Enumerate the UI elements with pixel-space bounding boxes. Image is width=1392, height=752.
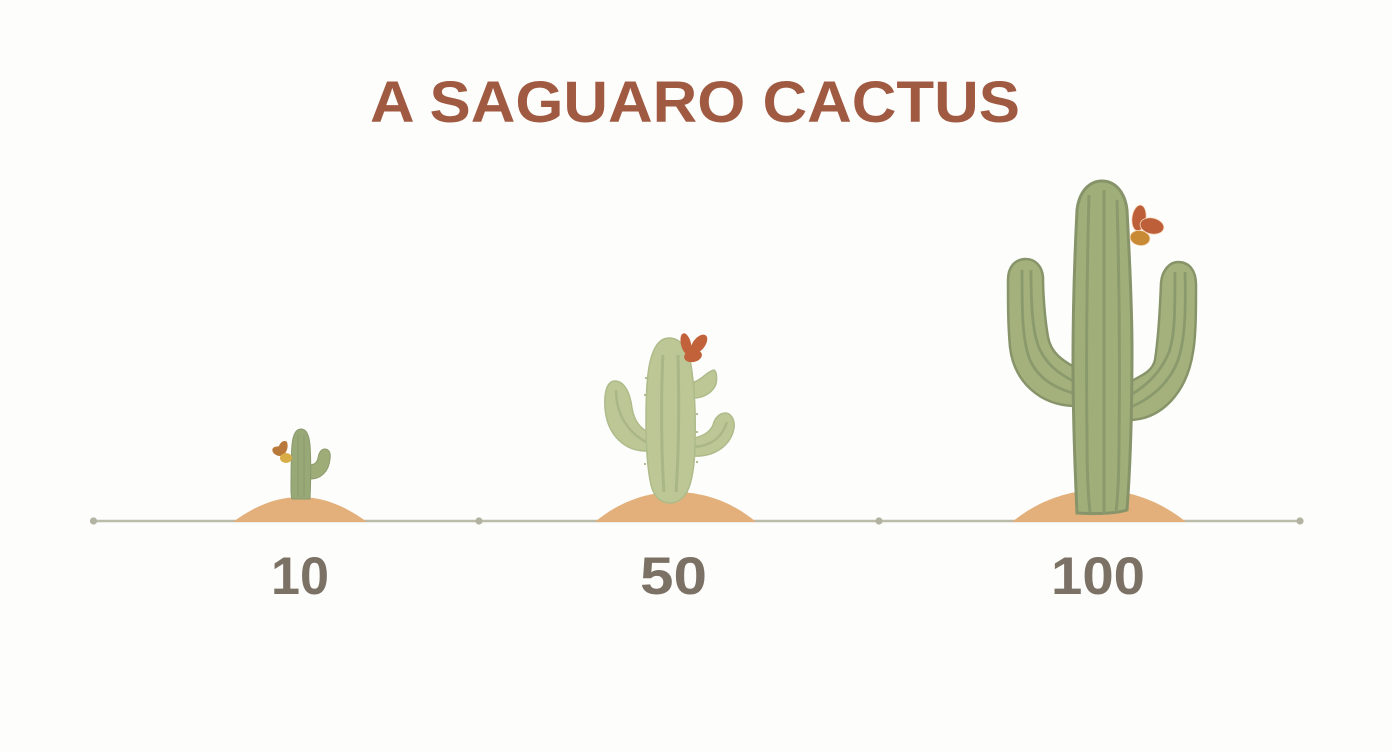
trunk [646, 338, 695, 503]
left arm [605, 381, 648, 451]
trunk [1073, 181, 1132, 514]
label: age 100: 100 [1051, 547, 1145, 606]
cactus: age 10 [272, 429, 330, 499]
arm [308, 449, 330, 479]
flowers [272, 441, 288, 456]
right arm [1130, 262, 1196, 420]
mound: age 50 [595, 492, 756, 522]
trunk [291, 429, 311, 499]
label: age 50: 50 [640, 547, 707, 606]
timeline axis [90, 517, 1304, 525]
mound: age 100 [1012, 490, 1186, 522]
spines [644, 377, 698, 465]
cactus: age 50 [605, 332, 734, 503]
flowers [1130, 204, 1148, 232]
left arm [1008, 259, 1074, 406]
title: A SAGUARO CACTUS [370, 70, 1020, 135]
cactus: age 100 [1008, 181, 1196, 514]
label: age 10: 10 [271, 547, 329, 606]
flowers [678, 332, 694, 356]
upper right arm [694, 370, 717, 398]
lower right arm [694, 413, 734, 456]
mound: age 10 [233, 497, 367, 522]
